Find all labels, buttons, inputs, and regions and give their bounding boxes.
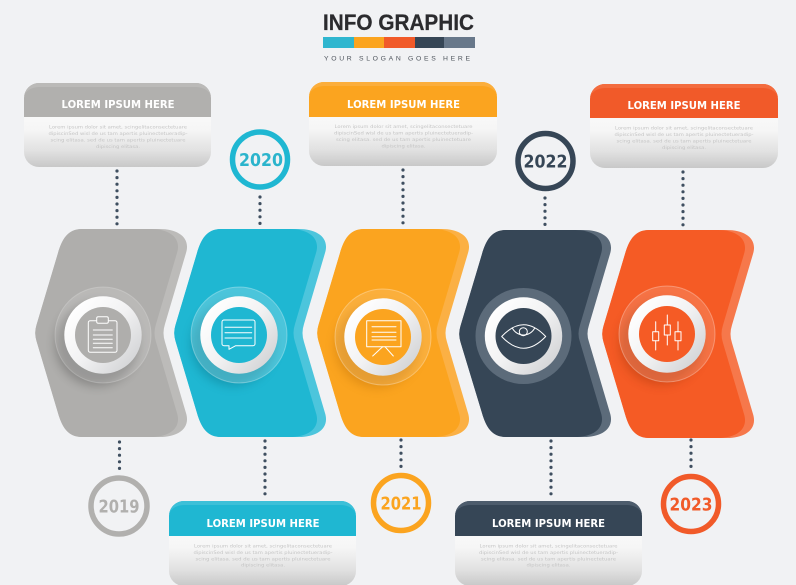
panel: 2022 text box <box>455 501 642 585</box>
body text: dipiscing elitasa. <box>96 144 140 149</box>
year badge: 2020 <box>232 132 288 187</box>
title block <box>323 10 475 62</box>
icon: eye <box>502 325 546 348</box>
body text: dipiscinSed wisl de us tam apertis pluinectetueradip- <box>334 130 474 136</box>
body text: scing elitasa. sed de us tam apertis pluinectetuare <box>481 556 617 562</box>
heading: LOREM IPSUM HERE <box>628 99 740 112</box>
body text: dipiscinSed wisl de us tam apertis pluinectetueradip- <box>614 132 754 137</box>
year badge: 2020: 2020 <box>239 150 283 171</box>
body text <box>48 124 188 149</box>
heading: LOREM IPSUM HERE <box>62 98 174 111</box>
panel: orange arrow 2021 <box>317 229 469 437</box>
panel: teal arrow 2020 <box>174 229 326 437</box>
slogan: YOUR SLOGAN GOES HERE <box>324 56 470 62</box>
panel: 2021 text box <box>309 82 497 166</box>
panel: navy arrow 2022 <box>459 230 611 437</box>
body text: dipiscing elitasa. <box>382 144 426 148</box>
year badge: 2023 <box>664 476 718 532</box>
heading: LOREM IPSUM HERE <box>206 517 320 530</box>
body text <box>614 126 754 150</box>
year badge: 2022 <box>518 134 573 188</box>
year badge: 2022: 2022 <box>524 152 568 172</box>
panel: 2019 text box <box>24 83 211 167</box>
body text: dipiscinSed wisl de us tam apertis pluinectetueradip- <box>479 550 619 555</box>
icon: chat bubble <box>222 320 255 349</box>
body text: dipiscing elitasa. <box>662 145 706 150</box>
body text: dipiscing elitasa. <box>526 562 570 568</box>
title: INFO GRAPHIC <box>323 10 474 35</box>
body text <box>194 544 333 568</box>
colour strip <box>323 37 475 48</box>
body text: Lorem ipsum dolor sit amet, scingelitaconsectetuare <box>480 544 618 548</box>
icon: presentation board <box>367 321 401 356</box>
year badge: 2021: 2021 <box>380 494 422 514</box>
body text: Lorem ipsum dolor sit amet, scingelitaconsectetuare <box>615 126 754 130</box>
panel: 2020 text box <box>169 501 356 585</box>
body text: scing elitasa. sed de us tam apertis pluinectetuare <box>50 138 186 142</box>
year badge: 2023: 2023 <box>670 494 712 516</box>
body text: scing elitasa. sed de us tam apertis pluinectetuare <box>336 137 472 142</box>
body text: dipiscing elitasa. <box>241 562 285 568</box>
panel: 2023 text box <box>590 84 778 168</box>
body text: Lorem ipsum dolor sit amet, scingelitaconsectetuare <box>194 544 333 548</box>
panel: gray arrow 2019 <box>35 229 187 437</box>
body text: scing elitasa. sed de us tam apertis pluinectetuare <box>616 138 752 144</box>
heading: LOREM IPSUM HERE <box>492 517 605 530</box>
body text: scing elitasa. sed de us tam apertis pluinectetuare <box>196 556 331 562</box>
body text: Lorem ipsum dolor sit amet, scingelitaconsectetuare <box>49 124 188 130</box>
year badge: 2021 <box>374 476 428 530</box>
year badge: 2019 <box>91 478 147 534</box>
connector dots <box>117 170 691 495</box>
body text: dipiscinSed wisl de us tam apertis pluinectetueradip- <box>194 550 333 555</box>
heading: LOREM IPSUM HERE <box>347 98 460 111</box>
year badge: 2019: 2019 <box>98 496 140 518</box>
icon: sliders <box>653 315 681 350</box>
body text <box>479 544 619 568</box>
icon: clipboard <box>88 317 117 352</box>
body text: Lorem ipsum dolor sit amet, scingelitaconsectetuare <box>334 124 473 129</box>
body text: dipiscinSed wisl de us tam apertis pluinectetueradip- <box>48 131 188 136</box>
body text <box>334 124 474 148</box>
panel: red arrow 2023 <box>602 230 754 438</box>
